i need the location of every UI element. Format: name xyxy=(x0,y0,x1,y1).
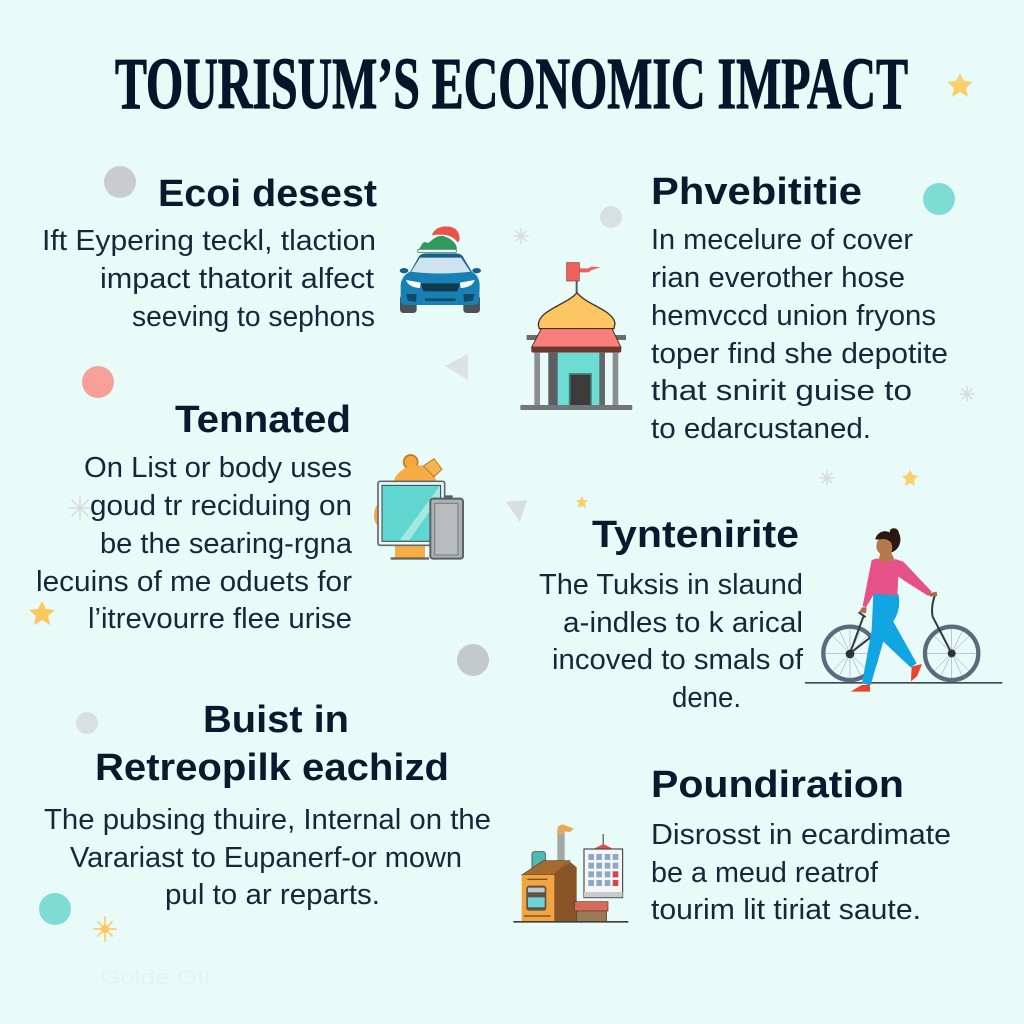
body text xyxy=(42,225,376,333)
panel: bottom right xyxy=(651,764,951,926)
body text: a-indles to k arical xyxy=(563,607,803,639)
body text: pul to ar reparts. xyxy=(165,879,380,911)
body text: impact thatorit alfect xyxy=(100,263,374,295)
body text: that snirit guise to xyxy=(651,375,912,407)
body text: be the searing-rgna xyxy=(100,528,353,560)
panel: top left xyxy=(42,173,377,333)
icon: car with luggage xyxy=(400,226,481,313)
heading: Retreopilk eachizd xyxy=(95,747,449,789)
heading: Tennated xyxy=(175,399,351,441)
heading: Tyntenirite xyxy=(592,514,799,556)
body text: tourim lit tiriat saute. xyxy=(651,894,921,926)
panel: bottom left xyxy=(44,699,491,911)
body text: rian everother hose xyxy=(651,262,905,294)
body text: goud tr reciduing on xyxy=(90,490,352,522)
icon: temple with flag xyxy=(520,263,632,410)
panel: top right xyxy=(651,171,948,445)
icon: monitor and device xyxy=(374,455,463,560)
icon: kiosk and calendar board xyxy=(513,825,628,923)
body text: dene. xyxy=(672,682,741,714)
watermark: Golde OIl xyxy=(100,967,210,989)
body text: Disrosst in ecardimate xyxy=(651,819,951,851)
body text xyxy=(651,224,948,445)
body text xyxy=(44,804,491,911)
body text: incoved to smals of xyxy=(552,644,804,676)
heading xyxy=(95,699,449,789)
body text: Varariast to Eupanerf-or mown xyxy=(70,842,462,874)
body text xyxy=(36,452,353,635)
decorative shapes xyxy=(29,73,974,941)
body text xyxy=(539,569,804,714)
body text: In mecelure of cover xyxy=(651,224,913,256)
body text: be a meud reatrof xyxy=(651,857,879,889)
icon: woman walking bicycle xyxy=(805,528,1002,692)
heading: Poundiration xyxy=(651,764,904,806)
heading: Ecoi desest xyxy=(158,173,377,215)
body text: hemvccd union fryons xyxy=(651,300,936,332)
body text: The pubsing thuire, Internal on the xyxy=(44,804,491,836)
body text: On List or body uses xyxy=(84,452,352,484)
body text: seeving to sephons xyxy=(132,301,375,333)
body text: l’itrevourre flee urise xyxy=(88,603,352,635)
panel: middle right xyxy=(539,514,804,714)
panel: middle left xyxy=(36,399,353,635)
body text: toper find she depotite xyxy=(651,338,948,370)
heading: Phvebititie xyxy=(651,171,862,213)
body text xyxy=(651,819,951,926)
heading: Buist in xyxy=(203,699,349,741)
body text: Ift Eypering teckl, tlaction xyxy=(42,225,376,257)
body text: lecuins of me oduets for xyxy=(36,566,352,598)
body text: to edarcustaned. xyxy=(651,413,871,445)
body text: The Tuksis in slaund xyxy=(539,569,803,601)
